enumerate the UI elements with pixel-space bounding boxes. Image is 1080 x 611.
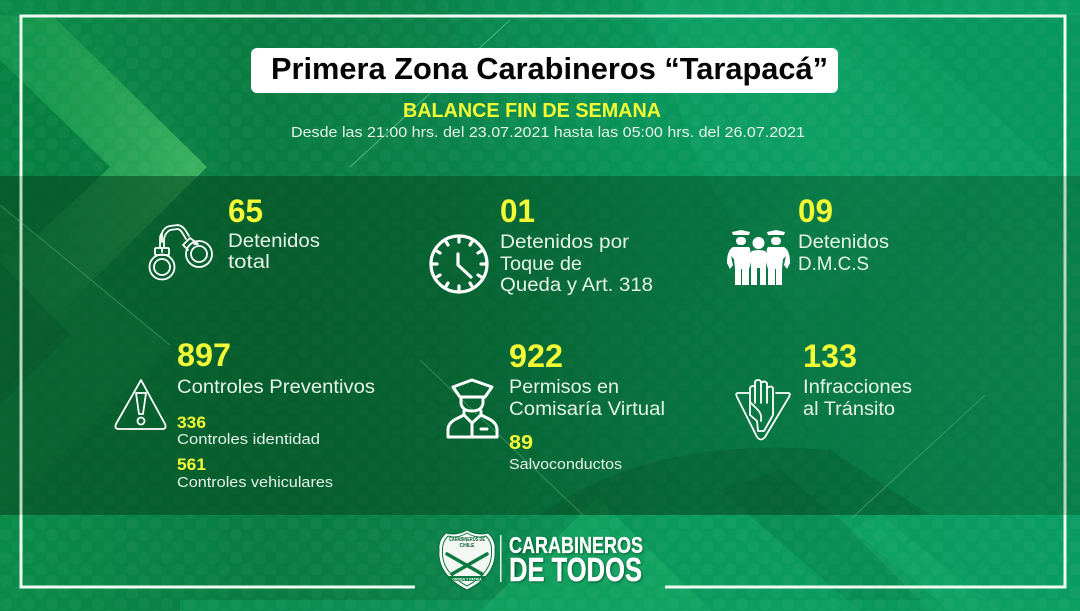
logo: carabineros shield <box>439 530 495 590</box>
sub-value: vehiculares: 561 <box>177 455 206 474</box>
subtitle: BALANCE FIN DE SEMANA <box>403 100 661 122</box>
label: Detenidos por <box>500 232 630 253</box>
logo wordmark: DE TODOS <box>509 551 642 588</box>
icon: police officer <box>448 380 497 437</box>
sub-value: identidad: 336 <box>177 413 206 432</box>
label: total <box>228 252 270 273</box>
logo: carabineros shield: CARABINEROS DE <box>449 537 486 543</box>
value: 133 <box>803 338 857 374</box>
value: 01 <box>500 193 535 229</box>
icon: handcuffs <box>150 225 212 280</box>
label: Comisaría Virtual <box>509 399 665 420</box>
logo: carabineros shield: ORDEN Y PATRIA <box>452 578 482 582</box>
value: 65 <box>228 193 263 229</box>
sub-label: salvoconductos: Salvoconductos <box>509 456 622 473</box>
logo divider <box>500 535 502 582</box>
diagonal accents <box>0 205 985 518</box>
label: al Tránsito <box>803 399 895 420</box>
title pill: Primera Zona Carabineros “Tarapacá” <box>271 51 828 86</box>
stat: toque de queda <box>431 193 653 296</box>
sub-label: vehiculares: Controles vehiculares <box>177 474 333 491</box>
label: Infracciones <box>803 377 912 398</box>
stat: detenidos DMCS <box>727 193 889 285</box>
label: D.M.C.S <box>798 254 869 275</box>
icon: clock <box>431 236 487 292</box>
frame segments dimmed inside band <box>20 176 1066 515</box>
label: Detenidos <box>228 231 320 252</box>
sub-label: identidad: Controles identidad <box>177 431 320 448</box>
label: Permisos en <box>509 377 619 398</box>
stat: controles preventivos <box>115 337 375 491</box>
label: Detenidos <box>798 232 889 253</box>
value: 897 <box>177 337 231 373</box>
stat: infracciones al transito <box>736 338 912 440</box>
icon: two officers and detainee <box>727 230 790 285</box>
stat: detenidos total <box>150 193 320 280</box>
label: Toque de <box>500 254 582 275</box>
logo wordmark: CARABINEROS <box>509 532 643 558</box>
label: Queda y Art. 318 <box>500 275 653 296</box>
dark content band <box>0 176 1080 515</box>
stat: permisos comisaria virtual <box>448 338 665 473</box>
value: 09 <box>798 193 833 229</box>
value: 922 <box>509 338 563 374</box>
logo wordmark <box>509 532 643 588</box>
date range: Desde las 21:00 hrs. del 23.07.2021 hasta las 05:00 hrs. del 26.07.2021 <box>291 124 805 141</box>
logo: carabineros shield: CHILE <box>460 543 475 549</box>
label: Controles Preventivos <box>177 377 375 398</box>
icon: warning triangle <box>115 380 166 429</box>
icon: hand in triangle <box>736 380 790 440</box>
sub-value: salvoconductos: 89 <box>509 432 533 454</box>
